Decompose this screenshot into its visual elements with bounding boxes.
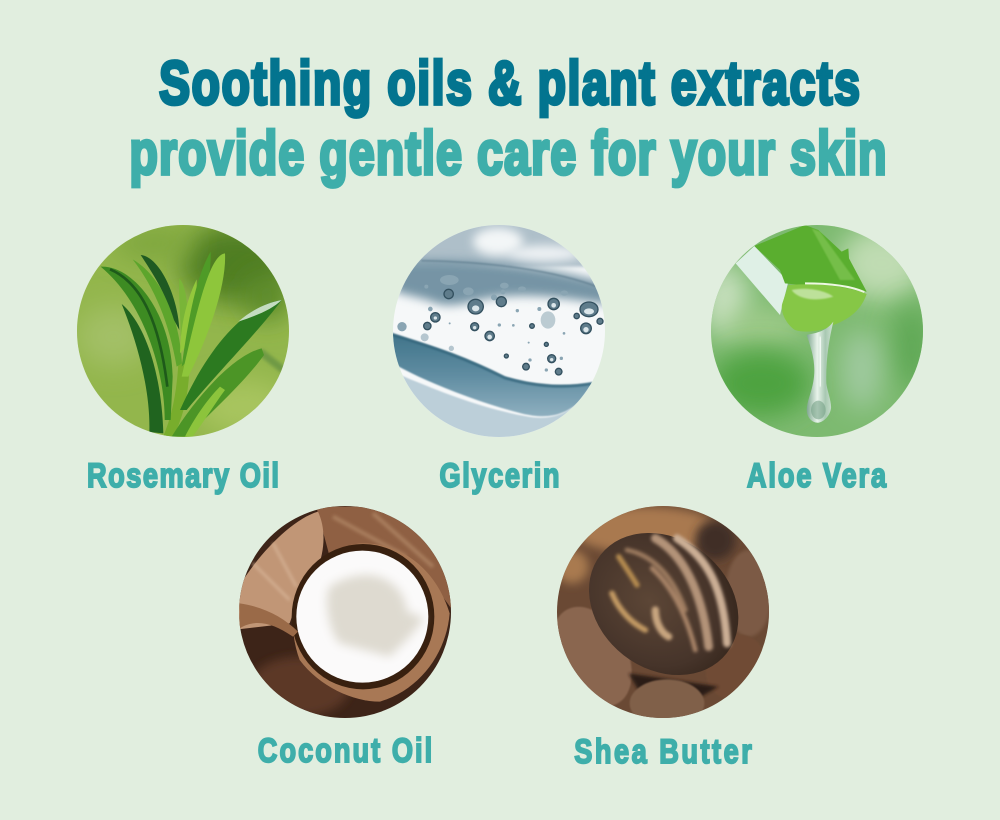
image: rosemary <box>77 225 289 437</box>
coconut shell <box>293 543 450 702</box>
image: aloe <box>711 225 923 437</box>
left husk <box>233 512 324 630</box>
image: coconut <box>239 506 451 718</box>
panel: coconut oil <box>239 506 451 764</box>
title: Soothing oils & plant extracts <box>159 50 860 118</box>
panel: shea butter <box>557 506 769 764</box>
label: Glycerin <box>439 456 560 495</box>
panel: aloe vera <box>711 225 923 488</box>
aloe leaf <box>736 246 788 315</box>
fiber wedge <box>240 603 298 637</box>
label: Aloe Vera <box>747 456 887 495</box>
panel: glycerin <box>388 220 613 495</box>
label: Coconut Oil <box>258 731 432 770</box>
title: provide gentle care for your skin <box>130 120 886 188</box>
back husk <box>317 506 451 608</box>
label: Rosemary Oil <box>87 456 279 495</box>
label: Shea Butter <box>574 732 752 771</box>
gel lower band <box>403 376 571 437</box>
bubbles <box>424 289 603 375</box>
title <box>130 50 886 188</box>
nut stripes <box>612 538 727 650</box>
panel: rosemary oil <box>70 220 295 495</box>
aloe gel drop <box>807 322 833 423</box>
image: shea nuts <box>557 506 769 718</box>
leaves <box>163 363 189 437</box>
image: gel <box>393 225 605 437</box>
